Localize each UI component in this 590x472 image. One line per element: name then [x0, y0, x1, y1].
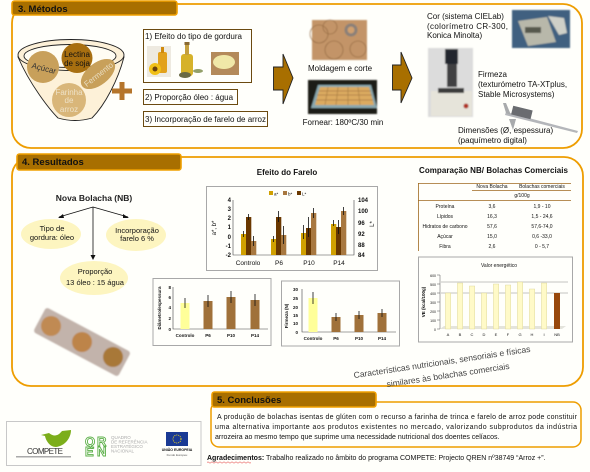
- chart: diâmetro/espessura: P14: [251, 333, 259, 338]
- photo: sunflower oil: [147, 46, 171, 77]
- diagram: nova bolacha: Incorporação: [115, 226, 159, 235]
- text: características rotated: Características nutricionais, sensoriais e físicas: [353, 344, 531, 380]
- arrow: to processing: [274, 54, 293, 104]
- logo: União Europeia: UNIÃO EUROPEIA: [162, 447, 193, 452]
- chart: valor energético: 0: [434, 328, 436, 332]
- chart: valor energético: Valor energético: [481, 263, 517, 269]
- chart: valor energético: B: [459, 332, 462, 337]
- heading: comparação: Comparação NB/ Bolachas Comerciais: [419, 166, 569, 175]
- panel: 3. Métodos: [12, 1, 582, 148]
- table: comparação nutricional: 0,6 -33,0: [532, 234, 552, 240]
- diagram: nova bolacha: Nova Bolacha (NB): [56, 193, 132, 203]
- heading: 3. Métodos: [12, 1, 177, 15]
- photo: colorimeter: [512, 10, 570, 48]
- logo: QREN: N: [97, 444, 106, 459]
- chart: valor energético: [418, 257, 572, 342]
- chart: firmeza: P6: [333, 336, 339, 341]
- chart: valor energético: 200: [430, 310, 436, 314]
- photo: margarine: [211, 52, 239, 75]
- chart: efeito do farelo: b*: [288, 192, 293, 196]
- text: características rotated: similares às bolachas comerciais: [386, 361, 510, 389]
- photo: caliper: [503, 103, 578, 133]
- chart: firmeza: Controlo: [304, 336, 323, 341]
- chart: efeito do farelo: L*: [370, 220, 376, 227]
- photo: oven tray: [308, 80, 377, 114]
- logo: COMPETE: COMPETE: [27, 447, 63, 456]
- chart: valor energético: 500: [430, 283, 436, 287]
- funnel of ingredients: Açúcar: [31, 61, 57, 76]
- logo: QREN: R: [97, 434, 107, 449]
- chart: firmeza: P10: [355, 336, 363, 341]
- funnel of ingredients: Farinha: [55, 88, 83, 97]
- box: efeito do tipo de gordura: 1) Efeito do tipo de gordura: [145, 32, 243, 41]
- text: agradecimentos: Agradecimentos: Trabalho realizado no âmbito do programa COMPETE: Projecto QREN nº38749 “Arroz +”.: [207, 455, 546, 462]
- chart: efeito do farelo: a*, b*: [212, 220, 218, 235]
- diagram: nova bolacha: gordura: óleo: [30, 233, 74, 242]
- box: incorporação de farelo de arroz: 3) Incorporação de farelo de arroz: [145, 115, 266, 124]
- funnel of ingredients: arroz: [60, 105, 78, 114]
- logo: QREN: ESTRATÉGICO: [111, 443, 143, 449]
- logo: QREN: [85, 434, 148, 459]
- label: moldagem e corte: Moldagem e corte: [308, 64, 373, 73]
- text: firmeza: Stable Microsystems): [478, 90, 555, 99]
- text: cor: Konica Minolta): [427, 31, 482, 40]
- chart: diâmetro/espessura: Diâmetro/espessura: [157, 286, 162, 330]
- chart: valor energético: NB: [554, 332, 560, 337]
- table: comparação nutricional: 15,0: [487, 234, 497, 240]
- logo: QREN: DE REFERÊNCIA: [111, 438, 148, 444]
- chart: efeito do farelo: 3: [228, 207, 232, 213]
- chart: firmeza: Firmeza (N): [284, 303, 289, 328]
- box: incorporação de farelo de arroz: [144, 112, 268, 126]
- chart: efeito do farelo: 104: [358, 198, 369, 204]
- table: comparação nutricional: 57,6: [487, 224, 497, 230]
- chart: firmeza: 30: [293, 287, 298, 292]
- text: cor: [427, 12, 508, 40]
- chart: efeito do farelo: Controlo: [236, 260, 261, 267]
- table: comparação nutricional: 1,9 - 10: [534, 204, 551, 210]
- box: efeito do tipo de gordura: [144, 30, 252, 82]
- icon: plus: [112, 82, 132, 100]
- chart: efeito do farelo: -1: [226, 244, 232, 250]
- table: comparação nutricional: 3,6: [489, 204, 496, 210]
- logo: COMPETE: [16, 430, 71, 458]
- chart: diâmetro/espessura: P6: [205, 333, 211, 338]
- text: dimensões: [458, 126, 553, 145]
- diagram: nova bolacha: farelo 6 %: [120, 234, 154, 243]
- table: comparação nutricional: Bolachas comerciais: [519, 184, 565, 190]
- chart: firmeza: P14: [378, 336, 386, 341]
- funnel of ingredients: Lectina: [64, 50, 90, 59]
- logo: QREN: Q: [85, 434, 95, 449]
- logo: QREN: NACIONAL: [111, 448, 135, 454]
- photo: texturometer: [428, 48, 473, 117]
- chart: efeito do farelo: L*: [302, 192, 307, 196]
- chart: efeito do farelo: 0: [228, 235, 232, 241]
- chart: efeito do farelo: P10: [303, 260, 315, 267]
- table: comparação nutricional: Fibra: [439, 244, 451, 250]
- heading: 4. Resultados: 4. Resultados: [22, 157, 84, 168]
- photo: olive oil: [179, 42, 203, 78]
- text: firmeza: [478, 70, 567, 99]
- chart: valor energético: A: [447, 332, 450, 337]
- chart: firmeza: 20: [293, 305, 298, 310]
- chart: valor energético: VE (kcal/100g): [421, 286, 426, 317]
- arrow: to analyses: [392, 52, 412, 103]
- text: dimensões: (paquímetro digital): [458, 136, 527, 145]
- text: conclusões: A produção de bolachas isentas de glúten com o recurso a farinha de trinca e farelo de arroz pode constituir: [217, 414, 578, 421]
- chart: diâmetro/espessura: 8: [168, 285, 171, 290]
- table: comparação nutricional: Açúcar: [437, 234, 453, 240]
- logo: União Europeia: [162, 432, 193, 457]
- diagram: nova bolacha: 13 óleo : 15 água: [66, 278, 125, 287]
- chart: valor energético: G: [518, 332, 522, 337]
- text: conclusões: uma alternativa importante aos produtos existentes no mercado, valorizando subprodutos da indústria: [215, 424, 577, 431]
- chart: efeito do farelo: 96: [358, 221, 365, 227]
- chart: efeito do farelo: a*: [274, 192, 279, 196]
- panel: 5. Conclusões: [211, 392, 581, 447]
- funnel of ingredients: Fermento: [82, 60, 115, 89]
- heading: 3. Métodos: 3. Métodos: [18, 4, 68, 15]
- text: conclusões: arrozeira ao mesmo tempo que suprime uma necessidade nutricional dos doentes celíacos.: [215, 434, 499, 441]
- chart: diâmetro/espessura: 6: [168, 295, 171, 300]
- logo: QREN: QUADRO: [111, 435, 131, 440]
- funnel of ingredients: de soja: [64, 59, 90, 68]
- text: conclusões: [215, 414, 578, 441]
- chart: firmeza: 15: [293, 313, 298, 318]
- chart: valor energético: C: [471, 332, 474, 337]
- table: comparação nutricional: Hidratos de carbono: [422, 224, 468, 230]
- text: dimensões: Dimensões (Ø, espessura): [458, 126, 553, 135]
- chart: firmeza: [282, 281, 400, 346]
- table: comparação nutricional: 1,5 - 24,6: [531, 214, 553, 220]
- photo: biscuits on tray: [33, 307, 131, 377]
- chart: efeito do farelo: P14: [333, 260, 345, 267]
- chart: efeito do farelo: 4: [228, 198, 232, 204]
- chart: valor energético: 100: [430, 319, 436, 323]
- heading: 4. Resultados: [17, 154, 181, 170]
- chart: diâmetro/espessura: 4: [168, 305, 171, 310]
- chart: diâmetro/espessura: 0: [168, 327, 171, 332]
- chart: firmeza: 0: [295, 330, 298, 335]
- table: comparação nutricional: Lípidos: [437, 214, 454, 220]
- chart: diâmetro/espessura: Controlo: [176, 333, 195, 338]
- chart: efeito do farelo: [206, 186, 378, 270]
- table: comparação nutricional: Proteína: [436, 204, 455, 210]
- box: proporção óleo água: 2) Proporção óleo : água: [145, 93, 234, 102]
- table: comparação nutricional: 0 - 5,7: [535, 244, 549, 250]
- table: comparação nutricional: 2,6: [489, 244, 496, 250]
- chart: efeito do farelo: 100: [358, 209, 369, 215]
- text: cor: Cor (sistema CIELab): [427, 12, 504, 21]
- diagram: nova bolacha: Tipo de: [40, 224, 64, 233]
- chart: valor energético: I: [543, 332, 545, 337]
- chart: diâmetro/espessura: P10: [227, 333, 235, 338]
- funnel of ingredients: de: [65, 96, 74, 105]
- chart: valor energético: 600: [430, 274, 436, 278]
- table: comparação nutricional: Nova Bolacha: [476, 184, 508, 190]
- chart: efeito do farelo: 84: [358, 253, 365, 259]
- heading: efeito do farelo: Efeito do Farelo: [257, 168, 317, 177]
- chart: efeito do farelo: -2: [226, 253, 232, 259]
- logo: QREN: E: [85, 444, 94, 459]
- text: firmeza: Firmeza: [478, 70, 507, 79]
- chart: diâmetro/espessura: [153, 278, 271, 346]
- heading: 5. Conclusões: [212, 392, 376, 407]
- table: comparação nutricional: 57,6-74,0: [531, 224, 553, 230]
- chart: efeito do farelo: 2: [228, 216, 232, 222]
- chart: valor energético: D: [483, 332, 486, 337]
- text: cor: (colorímetro CR-300,: [427, 22, 508, 31]
- diagram: nova bolacha: [21, 193, 166, 295]
- label: fornear: Fornear: 180ºC/30 min: [303, 118, 383, 127]
- chart: firmeza: 10: [293, 321, 298, 326]
- chart: efeito do farelo: 88: [358, 243, 365, 249]
- logo: União Europeia: Fundo Europeu: [167, 453, 188, 457]
- table: comparação nutricional: g/100g: [514, 193, 530, 199]
- chart: diâmetro/espessura: 2: [168, 316, 171, 321]
- photo: moldagem e corte: [310, 20, 367, 60]
- chart: valor energético: 400: [430, 292, 436, 296]
- table: comparação nutricional: 16,3: [487, 214, 497, 220]
- chart: efeito do farelo: 92: [358, 232, 365, 238]
- chart: valor energético: H: [531, 332, 534, 337]
- chart: valor energético: F: [507, 332, 510, 337]
- funnel of ingredients: [18, 40, 124, 120]
- panel: 4. Resultados: [12, 154, 583, 389]
- chart: efeito do farelo: P6: [275, 260, 283, 267]
- chart: efeito do farelo: 1: [228, 225, 232, 231]
- heading: 5. Conclusões: 5. Conclusões: [217, 395, 281, 406]
- chart: valor energético: 300: [430, 301, 436, 305]
- diagram: nova bolacha: Proporção: [78, 267, 112, 276]
- logos: [6, 422, 201, 466]
- chart: valor energético: E: [495, 332, 498, 337]
- text: firmeza: (texturómetro TA-XTplus,: [478, 80, 567, 89]
- chart: firmeza: 25: [293, 296, 298, 301]
- box: proporção óleo água: [144, 90, 238, 104]
- table: comparação nutricional: [418, 183, 571, 251]
